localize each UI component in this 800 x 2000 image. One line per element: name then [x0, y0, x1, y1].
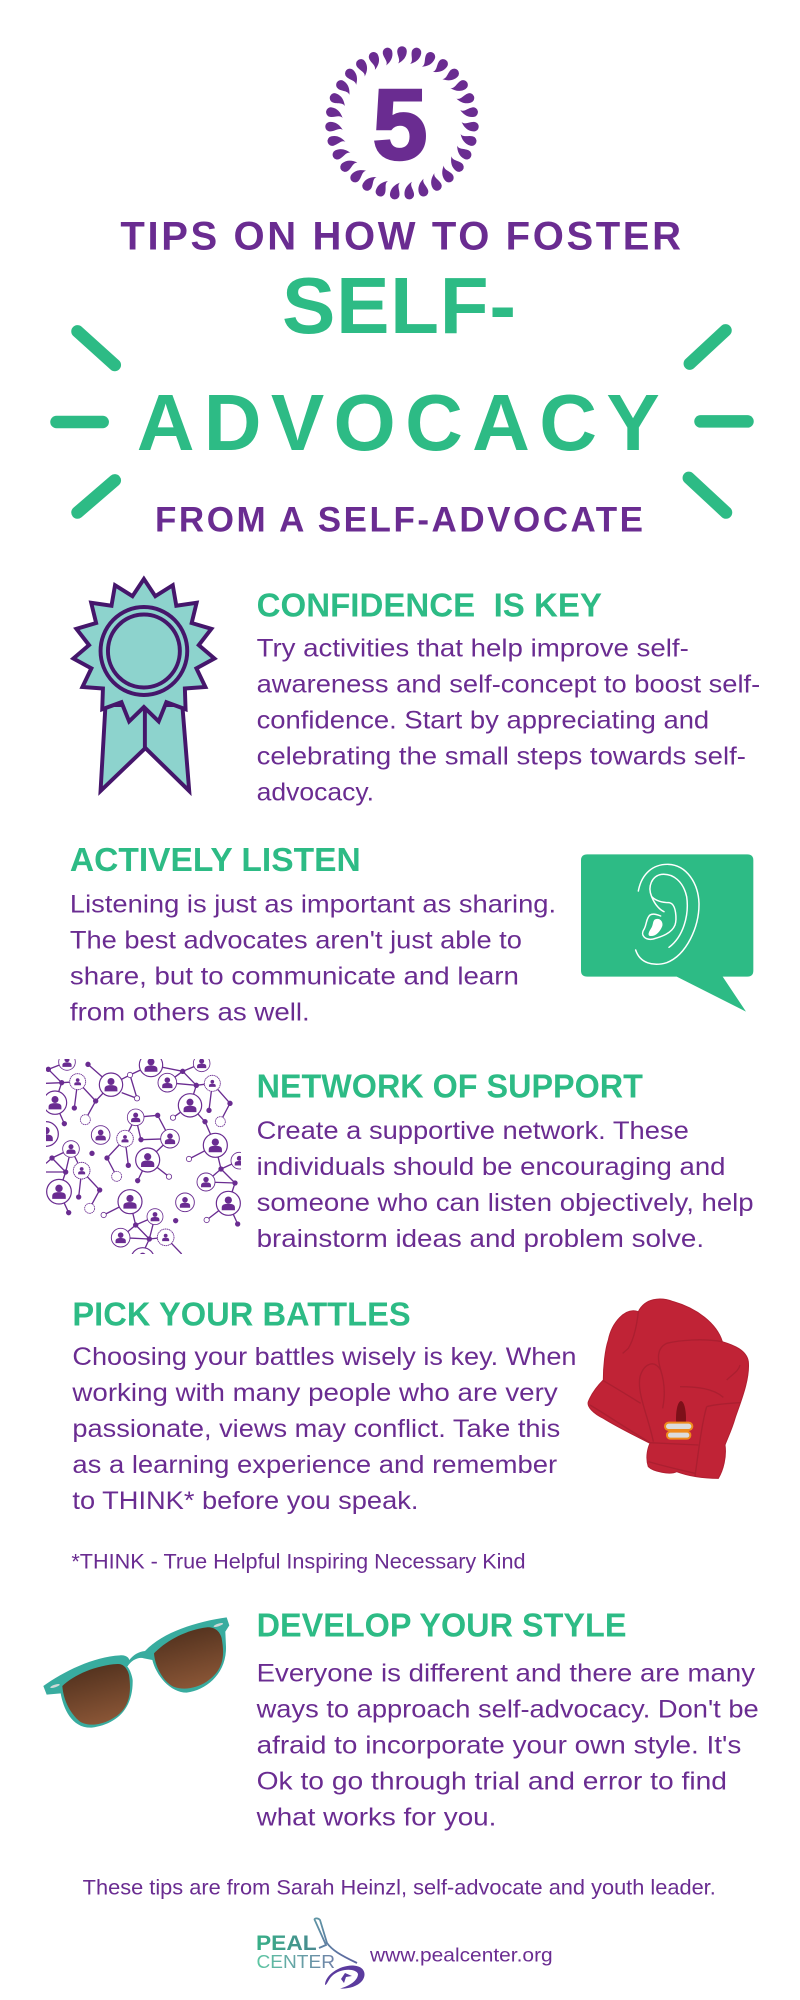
right lens: [154, 1627, 223, 1689]
body text: brainstorm ideas and problem solve.: [257, 1225, 704, 1253]
numeral 5: 5: [372, 69, 428, 181]
glove silhouette: [588, 1299, 749, 1478]
body text: individuals should be encouraging and: [257, 1153, 726, 1181]
title: tips on how to foster: TIPS ON HOW TO FOSTER: [120, 214, 681, 258]
ribbon tails: [101, 705, 189, 791]
body text: what works for you.: [255, 1804, 496, 1832]
ear outline: [636, 864, 699, 964]
badge: number 5 in ring of drops: [325, 46, 479, 200]
logo: peal center: [256, 1918, 365, 1989]
logo word center: CENTER: [256, 1951, 335, 1972]
body text: Ok to go through trial and error to find: [257, 1768, 727, 1796]
body text: someone who can listen objectively, help: [257, 1189, 754, 1217]
rosette: [73, 579, 214, 721]
title: self-: SELF-: [282, 261, 516, 350]
laces: [665, 1423, 692, 1439]
footnote: think acronym: *THINK - True Helpful Inspiring Necessary Kind: [71, 1550, 526, 1574]
speech bubble: [581, 854, 753, 1012]
body text: Everyone is different and there are many: [257, 1660, 756, 1688]
website url: www.pealcenter.org: [369, 1945, 553, 1967]
person nodes: [46, 1059, 241, 1254]
logo word peal: PEAL: [256, 1932, 317, 1955]
tip 3: network of support: [257, 1067, 754, 1253]
heading: PICK YOUR BATTLES: [72, 1296, 411, 1333]
body text: passionate, views may conflict. Take this: [72, 1415, 560, 1443]
rivets: [50, 1622, 223, 1689]
body text: ways to approach self-advocacy. Don't be: [256, 1696, 759, 1724]
credit line: These tips are from Sarah Heinzl, self-advocate and youth leader.: [83, 1876, 716, 1899]
body text: working with many people who are very: [71, 1379, 558, 1407]
tip 2: actively listen: [70, 841, 556, 1027]
connecting lines: [46, 1062, 239, 1254]
icon: network of people: [46, 1059, 241, 1254]
lace slit: [676, 1401, 686, 1436]
body text: [257, 635, 760, 807]
tip 5: develop your style: [255, 1607, 759, 1832]
body text: as a learning experience and remember: [72, 1451, 557, 1479]
icon: red boxing gloves: [588, 1299, 749, 1478]
body text: share, but to communicate and learn: [70, 963, 519, 991]
body text: [257, 1117, 754, 1253]
decorative rays around title: [56, 330, 748, 512]
heading: ACTIVELY LISTEN: [70, 841, 361, 878]
title: from a self-advocate: FROM A SELF-ADVOCATE: [155, 500, 643, 539]
body text: from others as well.: [70, 999, 310, 1027]
body text: [71, 1343, 577, 1515]
body text: [255, 1660, 759, 1832]
body text: celebrating the small steps towards self-: [257, 743, 746, 771]
body text: awareness and self-concept to boost self-: [257, 671, 760, 699]
icon: teal sunglasses: [43, 1617, 229, 1728]
frame: [43, 1617, 229, 1728]
glove creases: [590, 1312, 740, 1476]
body text: Try activities that help improve self-: [257, 635, 689, 663]
tip 1: confidence is key: [257, 587, 760, 807]
icon: ear in speech bubble: [581, 854, 753, 1012]
body text: advocacy.: [257, 779, 374, 807]
small dots: [46, 1062, 240, 1242]
heading: DEVELOP YOUR STYLE: [257, 1607, 626, 1644]
tip 4: pick your battles: [71, 1296, 577, 1515]
ring of teardrops: [325, 46, 479, 200]
logo bell mouth: [325, 1965, 365, 1989]
body text: to THINK* before you speak.: [72, 1487, 418, 1515]
heading: CONFIDENCE IS KEY: [257, 587, 602, 624]
icon: award ribbon: [73, 579, 214, 791]
logo bell handle: [315, 1918, 357, 1963]
body text: [70, 891, 556, 1027]
title: advocacy: ADVOCACY: [137, 378, 660, 467]
heading: NETWORK OF SUPPORT: [257, 1067, 643, 1104]
body text: The best advocates aren't just able to: [70, 927, 522, 955]
body text: Listening is just as important as sharing.: [70, 891, 556, 919]
hollow nodes: [80, 1072, 225, 1223]
body text: confidence. Start by appreciating and: [257, 707, 709, 735]
left lens: [62, 1664, 130, 1725]
body text: Create a supportive network. These: [257, 1117, 689, 1145]
body text: afraid to incorporate your own style. It's: [257, 1732, 741, 1760]
body text: Choosing your battles wisely is key. When: [72, 1343, 577, 1371]
